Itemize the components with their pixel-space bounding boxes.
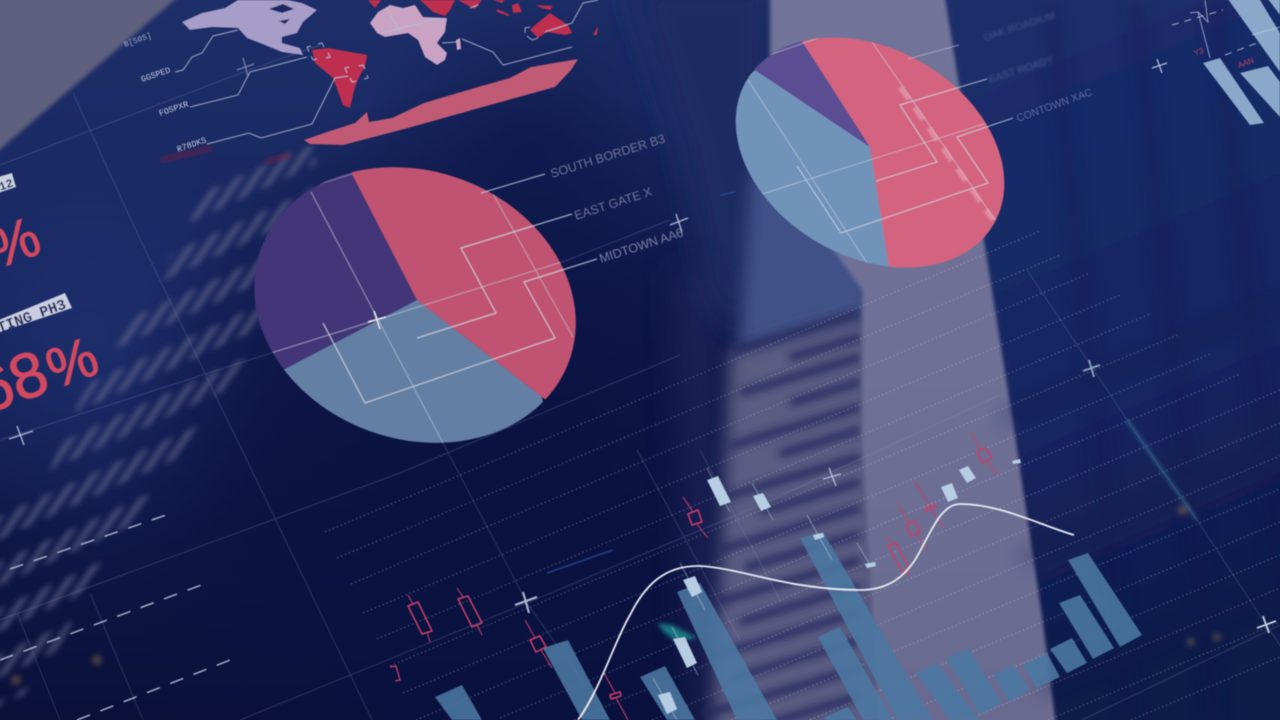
plus markers bbox=[9, 58, 1276, 633]
map label: GGSPED: GGSPED bbox=[140, 65, 172, 85]
map: Eurasia bbox=[368, 0, 553, 16]
candlesticks: white bbox=[653, 459, 1021, 720]
pie slice: blue bbox=[735, 70, 889, 266]
pie grid lines bbox=[748, 27, 995, 263]
highlighted dashed band bbox=[900, 87, 993, 220]
label: East Roady: EAST ROADY bbox=[987, 54, 1055, 86]
map: Madagascar bbox=[456, 38, 461, 50]
pie slice: blue bbox=[284, 300, 544, 444]
dark upper centre bbox=[300, 0, 800, 400]
top left sky wedge bbox=[0, 0, 186, 158]
right building window shading bbox=[1000, 0, 1280, 720]
left percentage panel bbox=[0, 173, 107, 428]
window strokes left bbox=[0, 144, 318, 708]
blurred red marks bbox=[161, 148, 290, 162]
tag: lower bbox=[0, 293, 72, 334]
bar chart: top right bbox=[1172, 0, 1280, 125]
label: Midtown AA6: MIDTOWN AA6 bbox=[598, 226, 685, 266]
pie slice: purple bbox=[254, 172, 418, 370]
map: North America bbox=[182, 0, 317, 55]
label: East Gate X: EAST GATE X bbox=[573, 184, 654, 223]
world map bbox=[123, 0, 598, 162]
map label: B[50S]: B[50S] bbox=[123, 32, 153, 50]
leader line: lower bbox=[797, 118, 1013, 233]
streak: teal highlight bbox=[1127, 420, 1197, 520]
mid building base bbox=[712, 312, 885, 720]
right pie chart bbox=[735, 12, 1092, 268]
leader line: top bbox=[908, 45, 959, 59]
label: AAN: AAN bbox=[1237, 56, 1255, 70]
map label: FOSPXR: FOSPXR bbox=[158, 99, 190, 119]
leader line: East Gate bbox=[417, 214, 572, 338]
dashed trend lines bbox=[0, 513, 238, 720]
tag: upper bbox=[0, 173, 16, 193]
label: South Border B3: SOUTH BORDER B3 bbox=[549, 132, 667, 181]
label: Oak Roadium: OAK ROADIUM bbox=[982, 9, 1057, 44]
leader line: Midtown bbox=[323, 259, 597, 403]
left building glow bbox=[0, 0, 500, 720]
pie grid lines bbox=[271, 192, 573, 443]
left pie chart bbox=[254, 134, 684, 444]
right building bbox=[945, 0, 1280, 720]
map: New Zealand bbox=[593, 26, 598, 35]
leader line: South Border bbox=[481, 174, 545, 193]
map: South America bbox=[312, 48, 367, 108]
pie slice: red bbox=[802, 37, 1006, 268]
map leader lines bbox=[175, 0, 598, 144]
map: Australia bbox=[530, 13, 572, 38]
trend curve bbox=[578, 504, 1074, 720]
map: Antarctica strip bbox=[304, 59, 578, 145]
map label: R78DKS: R78DKS bbox=[176, 135, 208, 155]
blue streaks bbox=[547, 192, 735, 573]
candlesticks: red bbox=[390, 433, 998, 720]
top right dashed lines bbox=[1172, 10, 1257, 55]
building lights bbox=[11, 505, 1221, 685]
label: Contown XAC: CONTOWN XAC bbox=[1015, 86, 1094, 125]
mid building stripes bbox=[705, 313, 860, 720]
pie slice: red bbox=[350, 166, 576, 400]
faint column bbox=[672, 270, 745, 720]
dotted chart grid lines bbox=[325, 231, 1280, 720]
top right line work bbox=[1190, 0, 1280, 58]
sky reflection bbox=[738, 170, 870, 352]
map: Africa bbox=[370, 5, 447, 65]
leader line: middle bbox=[876, 79, 987, 181]
pie slice: purple bbox=[754, 41, 870, 146]
bar chart: lower blue bars bbox=[435, 532, 1142, 720]
label: Y3: Y3 bbox=[1193, 46, 1205, 58]
teal glow marker bbox=[657, 623, 697, 641]
lit band between buildings bbox=[770, 0, 1058, 720]
lighter building side bbox=[625, 0, 775, 340]
dark central building bbox=[0, 0, 1000, 720]
map: North America lakes bbox=[269, 4, 294, 24]
